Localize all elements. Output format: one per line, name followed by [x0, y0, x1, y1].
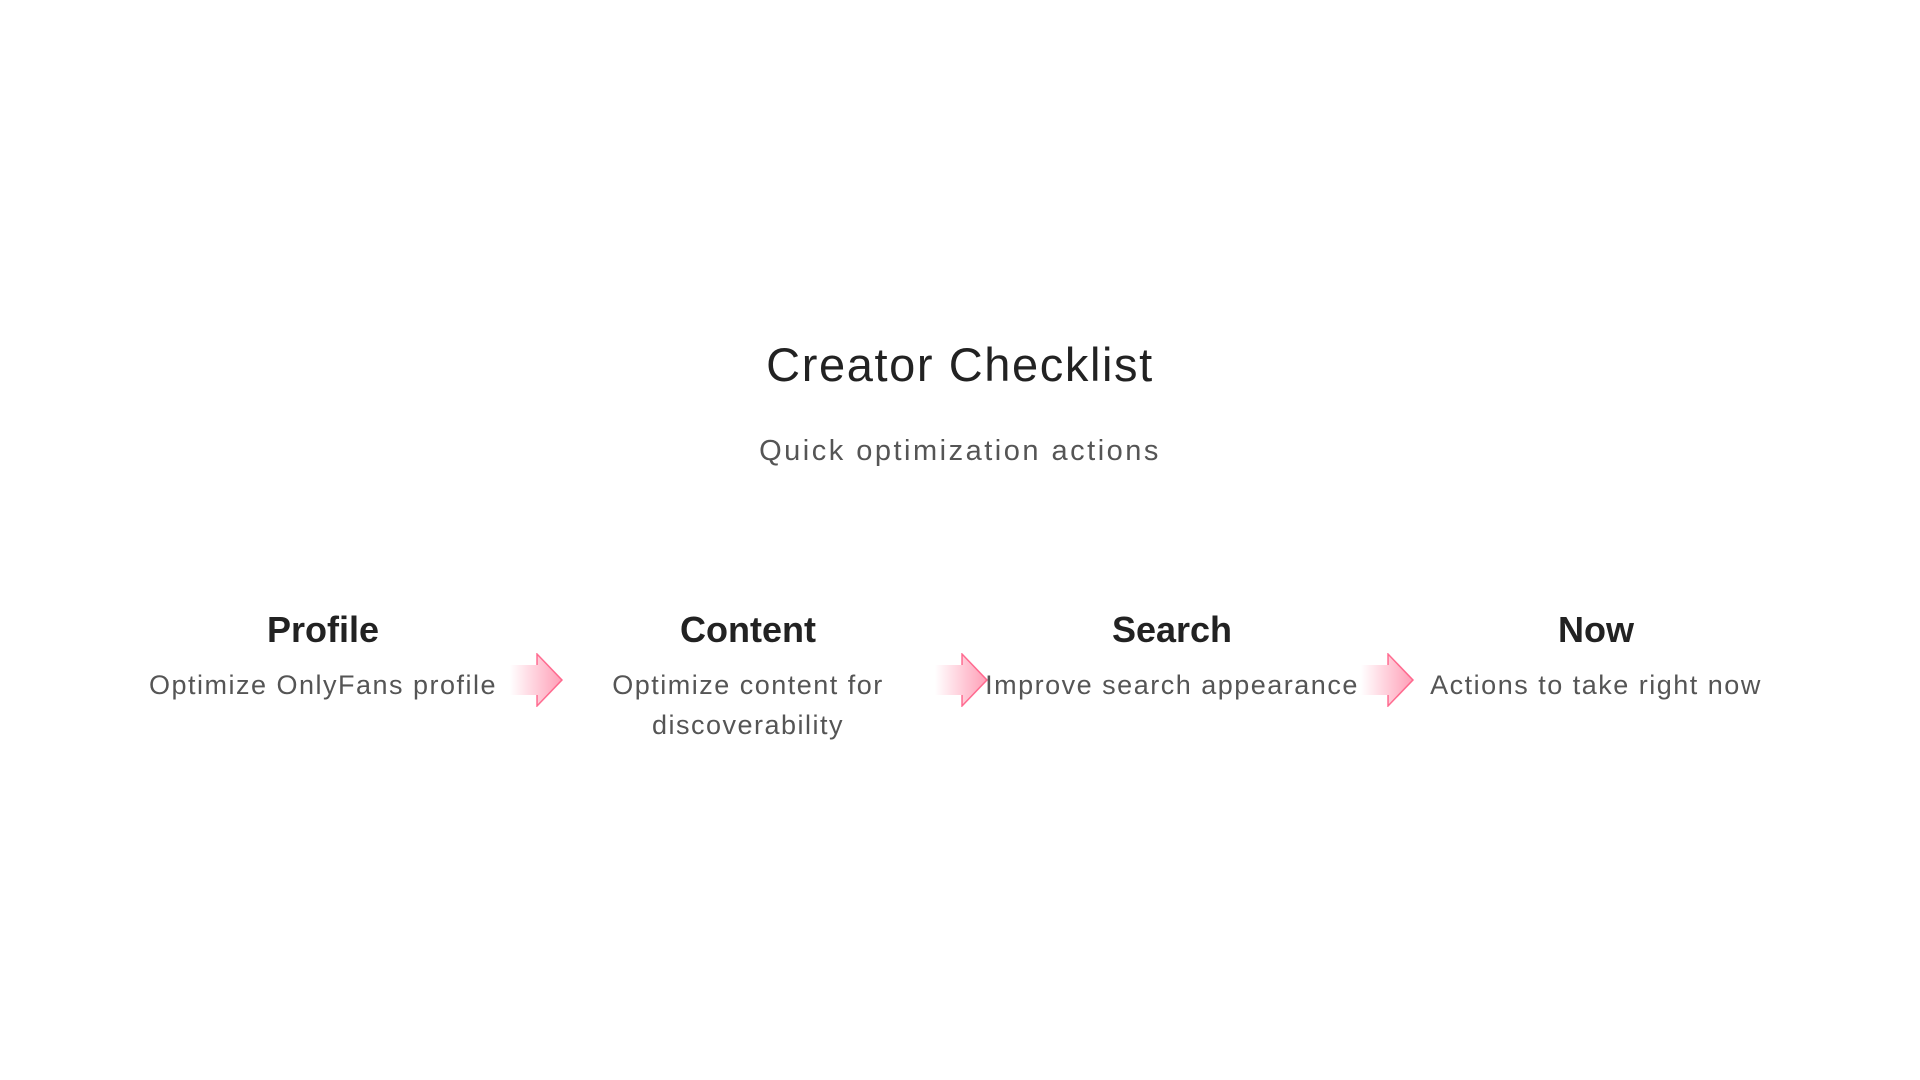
step: Search: Improve search appearance: [985, 670, 1359, 700]
step: Content: [612, 609, 884, 740]
step: Profile: Optimize OnlyFans profile: [149, 670, 497, 700]
step: Profile: [149, 609, 497, 700]
step: Content: discoverability: [652, 710, 844, 740]
step: Now: Actions to take right now: [1430, 670, 1762, 700]
step: Now: Now: [1558, 609, 1634, 650]
arrow 3: [1366, 653, 1414, 707]
subtitle: Quick optimization actions: [759, 435, 1161, 467]
step: Search: Search: [1112, 609, 1232, 650]
arrow 1: [514, 653, 563, 707]
step: Search: [985, 609, 1359, 700]
title: Creator Checklist: [766, 338, 1154, 391]
step: Content: Content: [680, 609, 816, 650]
step: Content: Optimize content for: [612, 670, 884, 700]
step: Now: [1430, 609, 1762, 700]
arrow 2: [940, 653, 988, 707]
step: Profile: Profile: [267, 609, 379, 650]
